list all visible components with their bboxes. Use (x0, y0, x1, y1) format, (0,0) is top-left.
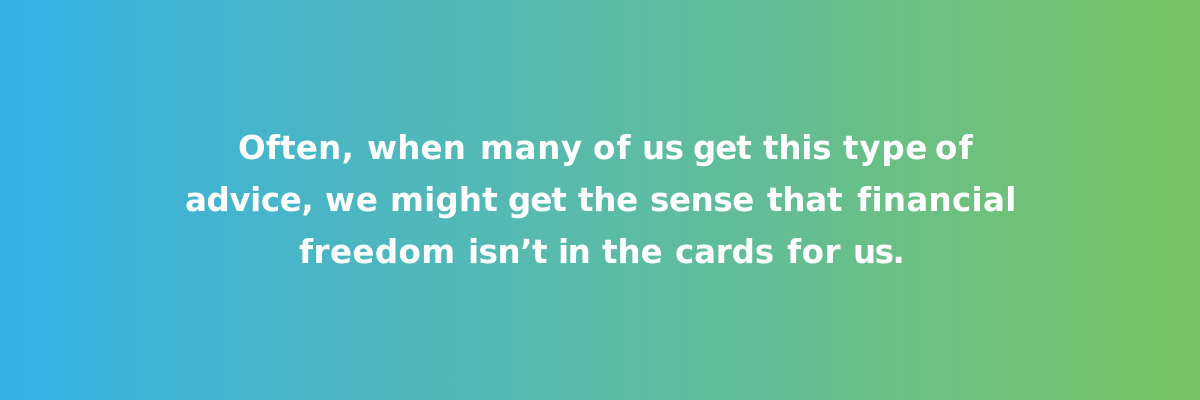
text block: quote: advice, (185, 181, 313, 219)
text block: quote: when (367, 129, 466, 167)
text block: quote: Often, (238, 129, 354, 167)
text block: quote: the (602, 233, 663, 271)
text block: quote: freedom (299, 233, 456, 271)
text block: quote: isn’t (468, 233, 547, 271)
text block: quote: get (508, 181, 566, 219)
text block: quote: sense (650, 181, 754, 219)
text block: quote: get (693, 129, 751, 167)
text block: quote: financial (857, 181, 1017, 219)
text block: quote: us. (853, 233, 903, 271)
text block: quote: in (558, 233, 589, 271)
text block: quote: us (642, 129, 683, 167)
text block: quote: might (390, 181, 498, 219)
text block: quote: of (935, 129, 974, 167)
text block: quote: type (843, 129, 928, 167)
text block: quote (185, 129, 1017, 271)
text block: quote: for (787, 233, 841, 271)
text block: quote: we (325, 181, 379, 219)
text block: quote: this (763, 129, 831, 167)
text block: quote: the (578, 181, 638, 219)
text block: quote: of (593, 129, 632, 167)
text block: quote: that (767, 181, 842, 219)
text block: quote: cards (675, 233, 774, 271)
text block: quote: many (480, 129, 583, 167)
